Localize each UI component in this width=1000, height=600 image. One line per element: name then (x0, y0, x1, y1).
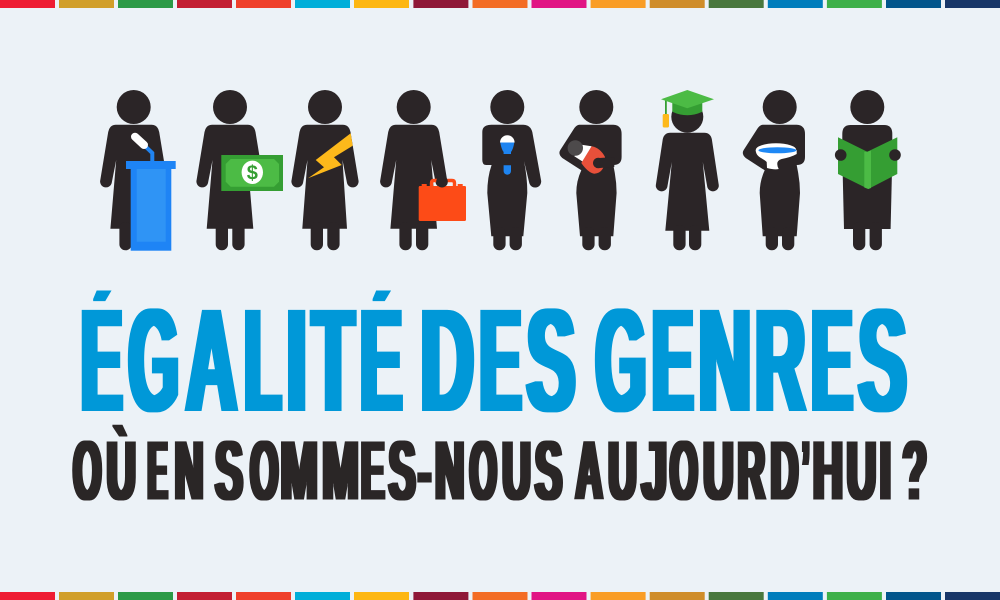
title: I (287, 279, 307, 443)
title: É (81, 279, 122, 443)
subtitle: E (148, 423, 167, 517)
bottom colour band (0, 592, 1000, 600)
figure: woman with lightning bolt (291, 90, 359, 250)
subtitle: H (813, 423, 843, 517)
title: G (129, 279, 179, 443)
subtitle: O (73, 423, 101, 517)
figure: woman at podium (100, 90, 176, 251)
subtitle: M (280, 423, 318, 517)
subtitle: O (250, 423, 278, 517)
text: ? (903, 423, 927, 517)
figure: woman holding baby (559, 90, 622, 250)
title: T (312, 279, 354, 443)
title: S (527, 279, 575, 443)
subtitle: Ù (107, 423, 136, 517)
subtitle: R (738, 423, 765, 517)
subtitle: O (670, 423, 698, 517)
title: N (699, 279, 751, 443)
subtitle: U (502, 423, 531, 517)
subtitle: N (435, 423, 464, 517)
figure: woman with banknote (196, 90, 283, 250)
subtitle (73, 423, 927, 517)
title: G (596, 279, 646, 443)
subtitle: A (576, 423, 602, 517)
title: E (811, 279, 852, 443)
title: R (755, 279, 805, 443)
text: S (858, 279, 906, 443)
subtitle: S (389, 423, 415, 517)
subtitle: U (703, 423, 734, 517)
figure: woman with briefcase (380, 90, 466, 250)
subtitle: S (535, 423, 562, 517)
figure: graduate woman with cap (656, 90, 719, 250)
top colour band (0, 0, 1000, 8)
figure: woman with banknote: $ (247, 162, 258, 184)
title: E (480, 279, 521, 443)
subtitle: I (880, 423, 891, 517)
title: L (244, 279, 281, 443)
title: É (360, 279, 402, 443)
title: A (186, 279, 237, 443)
title: E (652, 279, 693, 443)
subtitle: ’ (803, 423, 808, 517)
subtitle: N (175, 423, 204, 517)
subtitle: M (322, 423, 359, 517)
subtitle: - (418, 423, 431, 517)
title (81, 279, 907, 443)
figure: woman reading book (835, 90, 901, 250)
figure: woman with water bowl (743, 90, 805, 250)
subtitle: U (847, 423, 876, 517)
subtitle: O (470, 423, 497, 517)
subtitle: D (771, 423, 798, 517)
subtitle: U (608, 423, 637, 517)
title: D (421, 279, 474, 443)
figure: woman with microphone (482, 90, 541, 250)
subtitle: E (361, 423, 384, 517)
subtitle: J (642, 423, 667, 517)
subtitle: S (215, 423, 243, 517)
